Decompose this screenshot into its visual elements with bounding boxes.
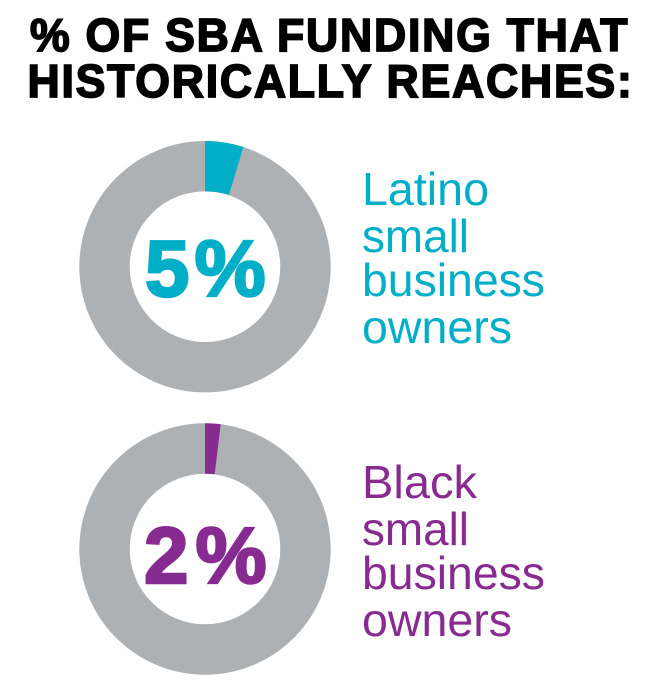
label: Black small business owners: small [362,503,469,555]
label: Black small business owners: business [362,547,545,599]
value: 2%: 2% [144,511,267,600]
panel: Black share [104,423,545,650]
label: Black small business owners [362,456,545,646]
label: Latino small business owners: small [362,210,469,262]
title [28,9,632,107]
title: % OF SBA FUNDING THAT [30,9,628,61]
label: Latino small business owners [362,163,545,353]
label: Black small business owners: owners [362,594,512,646]
title: HISTORICALLY REACHES: [28,55,632,107]
label: Latino small business owners: Latino [362,163,489,215]
value: 5%: 5% [145,224,266,313]
donut chart: 2% [104,423,306,650]
label: Black small business owners: Black [362,456,478,508]
donut chart: 5% [104,141,306,367]
label: Latino small business owners: business [362,254,545,306]
label: Latino small business owners: owners [362,301,512,353]
panel: Latino share [104,141,545,367]
